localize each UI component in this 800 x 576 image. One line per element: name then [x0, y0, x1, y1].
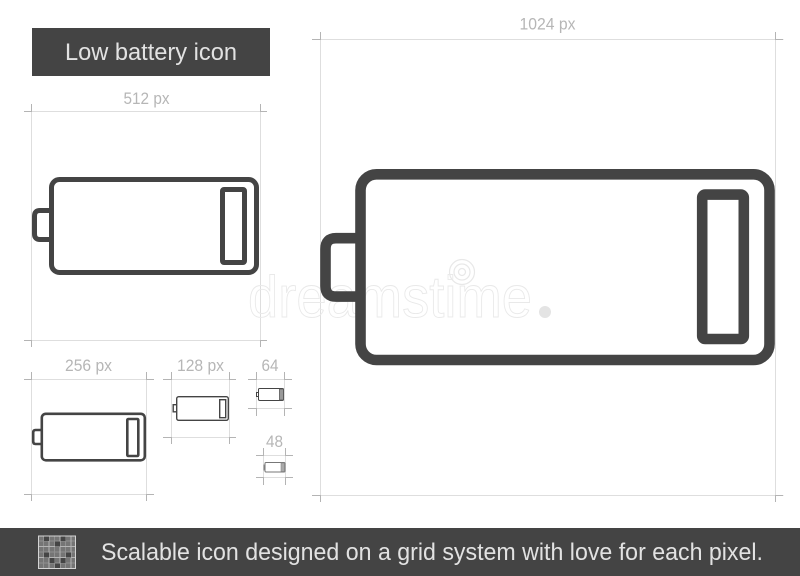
icon: battery 128 px [173, 397, 228, 420]
icon: battery 48 px [264, 462, 285, 472]
panel: 64 px grid: 64 [262, 357, 278, 375]
footer text: Scalable icon designed on a grid system with love for each pixel. [101, 539, 763, 566]
icon: battery 64 px [256, 388, 284, 400]
title banner [32, 28, 270, 76]
icon: pixel grid [38, 536, 76, 569]
watermark: dreamstime [248, 265, 532, 330]
panel: 48 px grid: 48 [266, 433, 283, 451]
panel: 128 px grid [163, 357, 236, 444]
panel: 48 px grid [256, 433, 293, 485]
panel: 64 px grid [248, 357, 292, 416]
panel: 1024 px grid: 1024 px [520, 16, 576, 34]
panel: 512 px grid [24, 90, 267, 347]
panel: 512 px grid: 512 px [124, 90, 170, 108]
panel: 256 px grid [24, 357, 154, 501]
panel: 128 px grid: 128 px [177, 357, 225, 375]
footer banner [0, 528, 800, 576]
icon: large battery 1024 px [326, 174, 770, 360]
icon: battery 256 px [33, 414, 145, 460]
title banner: Low battery icon [65, 39, 237, 66]
icon: battery 512 px [34, 180, 256, 272]
panel: 256 px grid: 256 px [65, 357, 113, 375]
